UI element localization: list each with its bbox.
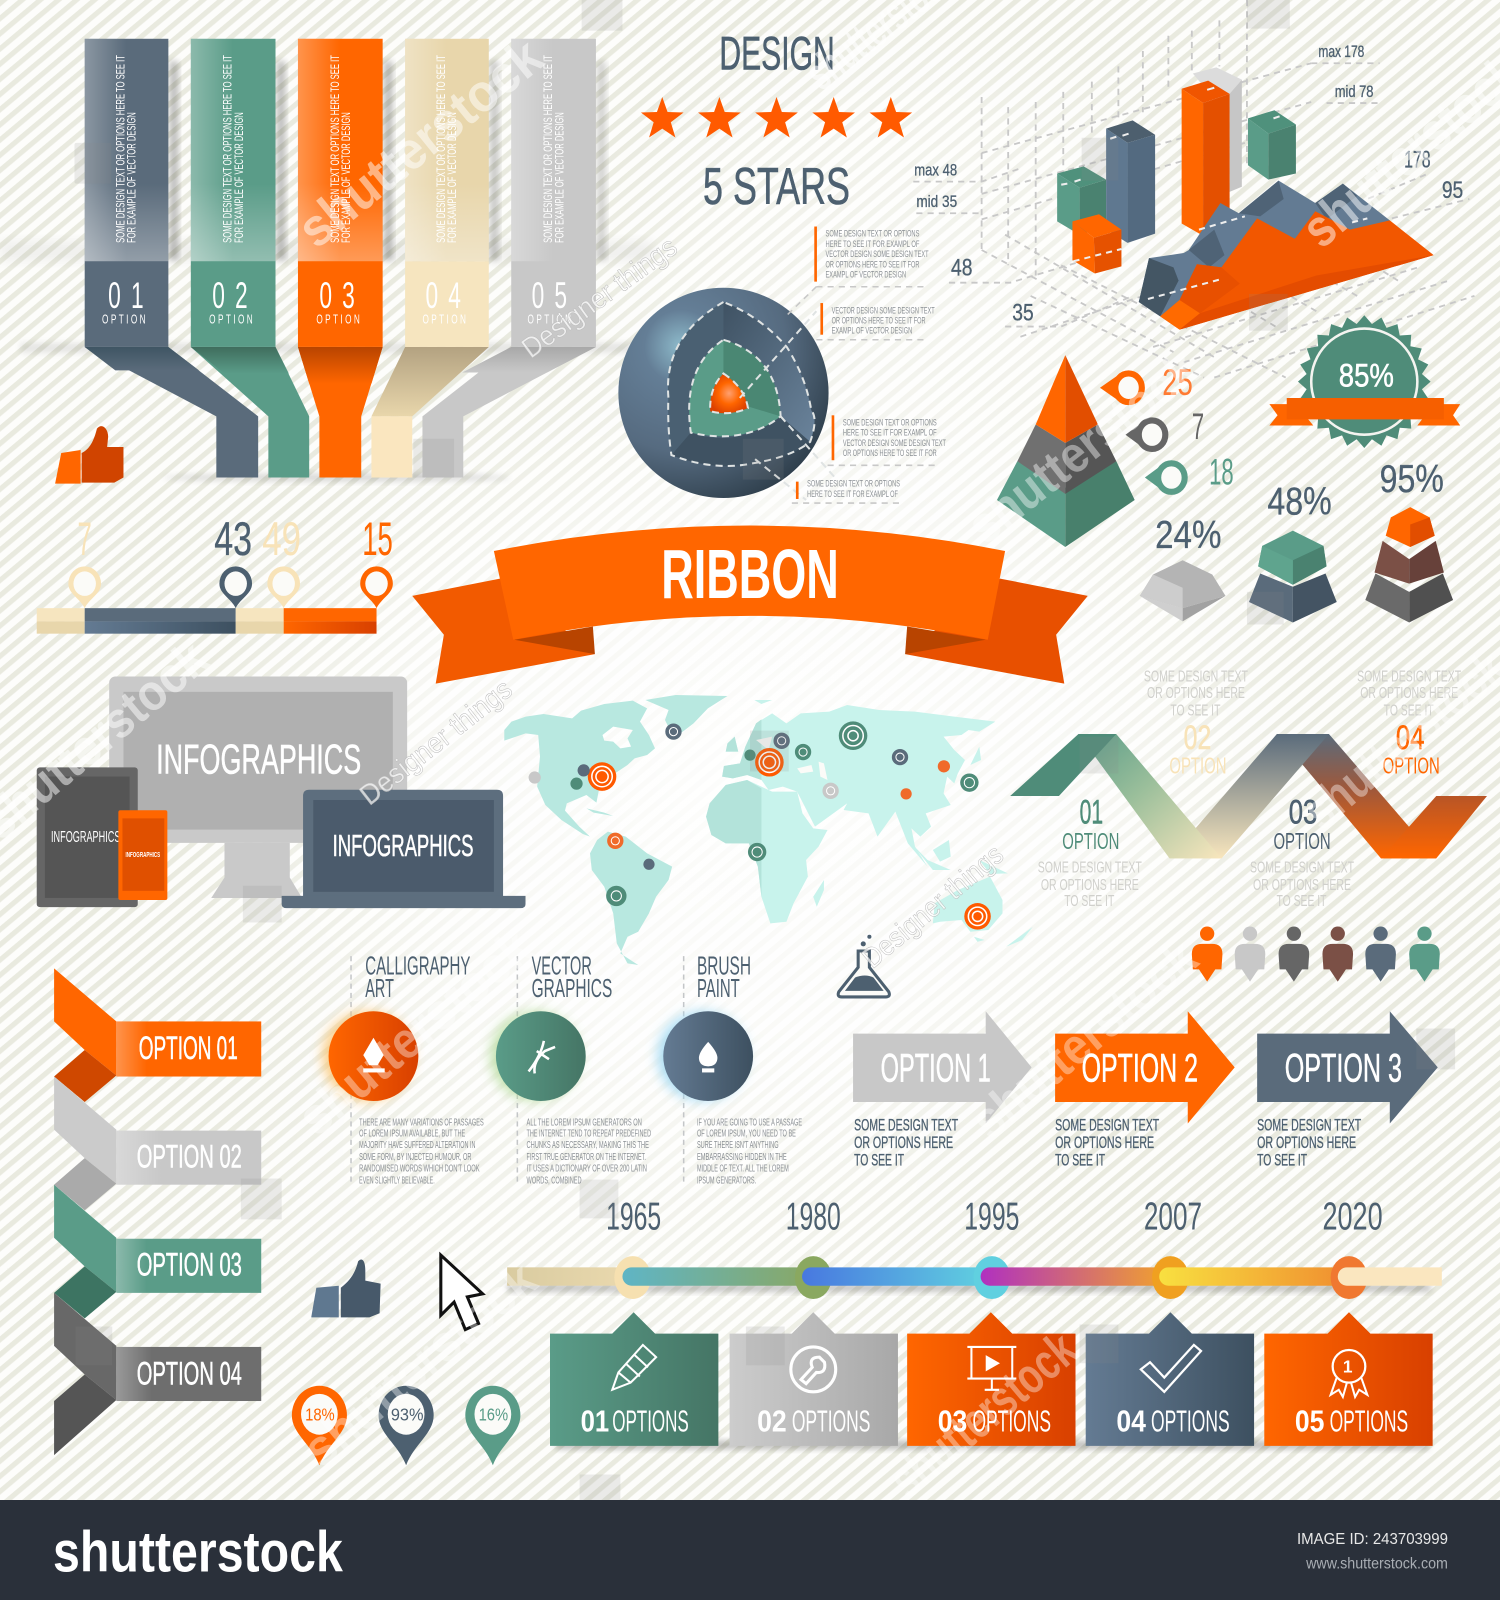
panel: brush paint: OF LOREM IPSUM, YOU NEED TO BE xyxy=(697,1129,796,1140)
footer image id: IMAGE ID: 243703999 xyxy=(1297,1531,1448,1548)
watermarks: shutterstock xyxy=(956,340,1209,555)
option 02 xyxy=(54,1077,261,1210)
column 05: 05 xyxy=(532,276,577,317)
marker 25: 25 xyxy=(1162,362,1193,403)
arrow: option 3: SOME DESIGN TEXT xyxy=(1257,1117,1361,1135)
column 04: OPTION xyxy=(422,313,468,327)
chart labels: 95 xyxy=(1442,177,1463,204)
panel: brush paint xyxy=(657,952,802,1187)
option 04: OPTION 04 xyxy=(137,1355,242,1392)
panel: vector graphics: ALL THE LOREM IPSUM GENERATORS ON xyxy=(527,1118,642,1129)
watermarks: shutterstock xyxy=(287,27,554,259)
chart labels: 178 xyxy=(1404,146,1431,173)
callout: text block 2: VECTOR DESIGN SOME DESIGN TEXT xyxy=(832,305,935,315)
box 02 xyxy=(730,1312,898,1446)
column 01: FOR EXAMPLE OF VECTOR DESIGN xyxy=(125,112,139,243)
stat: 95 percent block xyxy=(1365,458,1453,622)
stat: 48 percent block: 48% xyxy=(1267,480,1332,523)
chart: zigzag ribbon xyxy=(1010,669,1487,910)
column 03: 03 xyxy=(319,276,365,317)
grid floor xyxy=(913,0,1474,378)
panel: brush paint: IF YOU ARE GOING TO USE A PASSAGE xyxy=(697,1118,802,1129)
column 05: OPTION xyxy=(528,313,573,327)
heading: design: DESIGN xyxy=(719,27,835,79)
watermarks: shutterstock xyxy=(960,928,1208,1149)
icon: slate thumbs up xyxy=(311,1259,381,1317)
arrow: option 1: OR OPTIONS HERE xyxy=(854,1134,953,1152)
zigzag bands xyxy=(1010,734,1487,858)
callout: text block 2: OR OPTIONS HERE TO SEE IT FOR xyxy=(832,315,926,325)
box 01: OPTIONS xyxy=(612,1405,689,1439)
Africa and Eurasia xyxy=(706,700,1033,947)
marker 18 xyxy=(1145,452,1234,493)
panel: calligraphy art: MAJORITY HAVE SUFFERED ALTERATION IN xyxy=(359,1140,476,1151)
chart labels: max 48 xyxy=(914,162,957,180)
callout: text block 3: OR OPTIONS HERE TO SEE IT FOR xyxy=(843,448,937,458)
panel: calligraphy art: EVEN SLIGHTLY BELIEVABLE. xyxy=(359,1176,435,1187)
arrow: option 1: TO SEE IT xyxy=(854,1151,904,1169)
pin: 18 percent xyxy=(292,1386,347,1465)
world map xyxy=(504,695,1033,965)
watermarks: shutterstock xyxy=(287,918,543,1146)
box 01: 01 xyxy=(581,1405,609,1439)
option 01: OPTION 01 xyxy=(139,1029,238,1066)
stat: 95 percent block: 95% xyxy=(1380,458,1444,501)
pin: 93 percent xyxy=(379,1386,434,1465)
light descriptive text: SOME DESIGN TEXT xyxy=(1144,669,1248,686)
icon: cursor arrow xyxy=(441,1255,483,1330)
box 02: OPTIONS xyxy=(792,1405,870,1439)
box 05 xyxy=(1264,1312,1433,1446)
panel: calligraphy art: CALLIGRAPHY xyxy=(365,952,470,980)
column 05 xyxy=(422,39,596,478)
years: 1980 xyxy=(786,1196,841,1239)
column 03: FOR EXAMPLE OF VECTOR DESIGN xyxy=(339,112,353,243)
tablet: INFOGRAPHICS xyxy=(51,829,120,846)
option labels xyxy=(1062,719,1440,854)
timeline track xyxy=(507,1256,1442,1299)
chart: timeline xyxy=(507,1196,1442,1299)
Americas and Greenland xyxy=(504,695,728,965)
callout: text block 1: EXAMPL OF VECTOR DESIGN xyxy=(826,270,906,280)
column 02: 02 xyxy=(212,276,258,317)
footer bar xyxy=(0,1500,1500,1600)
box 01 xyxy=(550,1312,718,1446)
arrow: option 3: OPTION 3 xyxy=(1285,1047,1402,1091)
pin 43: 43 xyxy=(214,513,252,565)
callout: text block 2: EXAMPL OF VECTOR DESIGN xyxy=(832,326,912,336)
pin: 16 percent: 16% xyxy=(479,1404,508,1424)
watermarks: shutterstock xyxy=(292,1250,548,1478)
callout: text block 1: VECTOR DESIGN SOME DESIGN TEXT xyxy=(826,249,929,259)
callout: text block 3 xyxy=(828,415,946,465)
panel: calligraphy art: RANDOMISED WORDS WHICH DON'T LOOK xyxy=(359,1163,480,1174)
light descriptive text xyxy=(1038,669,1461,910)
box 05: 1 xyxy=(1343,1356,1353,1376)
inland seas xyxy=(756,737,828,780)
callout: text block 1 xyxy=(786,227,929,316)
light descriptive text: OR OPTIONS HERE xyxy=(1253,877,1351,894)
watermarks: Designer things xyxy=(516,231,683,365)
box 03 xyxy=(907,1312,1076,1446)
laptop xyxy=(282,790,526,908)
column 02: FOR EXAMPLE OF VECTOR DESIGN xyxy=(232,112,246,243)
bar: orange tall xyxy=(1182,81,1230,236)
callout: text block 2 xyxy=(816,303,935,340)
arrow: option 2: OPTION 2 xyxy=(1082,1047,1198,1091)
column 04: 04 xyxy=(426,276,471,317)
phone: INFOGRAPHICS xyxy=(126,851,160,859)
callout: text block 3: HERE TO SEE IT FOR EXAMPL OF xyxy=(843,428,937,438)
panel: vector graphics xyxy=(490,952,651,1187)
option labels: 02 xyxy=(1184,719,1211,757)
light descriptive text: TO SEE IT xyxy=(1277,893,1327,910)
column 05: FOR EXAMPLE OF VECTOR DESIGN xyxy=(552,112,566,243)
panel: calligraphy art xyxy=(322,952,484,1187)
panel: brush paint: EMBARRASSING HIDDEN IN THE xyxy=(697,1152,787,1163)
chart labels: mid 78 xyxy=(1335,83,1373,101)
heading: 5 stars: 5 STARS xyxy=(703,158,850,216)
pin 49 xyxy=(262,513,301,608)
callout: text block 1: OR OPTIONS HERE TO SEE IT FOR xyxy=(826,259,920,269)
panel: vector graphics: WORDS, COMBINED xyxy=(527,1176,582,1187)
watermarks: Designer things xyxy=(354,673,518,812)
panel: sphere with callouts xyxy=(618,227,946,503)
icon: vine xyxy=(529,1041,555,1073)
callout: text block 4: HERE TO SEE IT FOR EXAMPL OF xyxy=(807,489,898,499)
box 03: 03 xyxy=(938,1405,967,1439)
pin: 18 percent: 18% xyxy=(305,1404,335,1424)
option labels: OPTION xyxy=(1169,752,1227,778)
column 03: OPTION xyxy=(316,313,362,327)
callout: text block 1: HERE TO SEE IT FOR EXAMPL OF xyxy=(826,239,920,249)
tablet xyxy=(37,767,138,907)
pin 7 xyxy=(68,513,101,608)
bar: slate xyxy=(1106,120,1155,243)
years xyxy=(606,1196,1383,1239)
monitor xyxy=(109,677,407,898)
pin: 93 percent: 93% xyxy=(391,1404,423,1424)
arrow: option 1: OPTION 1 xyxy=(881,1047,991,1091)
bar: green left xyxy=(1057,166,1106,235)
option 01 xyxy=(54,968,261,1102)
panel: pin bar xyxy=(37,513,393,634)
arrow: option 3: OR OPTIONS HERE xyxy=(1257,1134,1356,1152)
panel: vector graphics: IT USES A DICTIONARY OF OVER 200 LATIN xyxy=(527,1163,647,1174)
monitor: INFOGRAPHICS xyxy=(156,735,361,782)
pin 49: 49 xyxy=(262,513,301,565)
callout: text block 1: SOME DESIGN TEXT OR OPTIONS xyxy=(826,229,919,239)
panel: calligraphy art: OF LOREM IPSUM AVAILABLE, BUT THE xyxy=(359,1129,466,1140)
box 04: OPTIONS xyxy=(1151,1405,1230,1439)
marker 7 xyxy=(1126,406,1204,449)
footer site: www.shutterstock.com xyxy=(1305,1555,1448,1572)
panel: vector graphics: GRAPHICS xyxy=(532,975,612,1003)
column 03 xyxy=(298,39,383,478)
light descriptive text: TO SEE IT xyxy=(1384,702,1434,719)
light descriptive text: OR OPTIONS HERE xyxy=(1360,685,1458,702)
option 04 xyxy=(54,1293,261,1455)
panel: chevron options xyxy=(54,968,261,1455)
chart labels: mid 35 xyxy=(916,193,957,211)
marker 25 xyxy=(1100,362,1193,403)
laptop: INFOGRAPHICS xyxy=(333,829,473,863)
stat: 48 percent block xyxy=(1249,480,1337,622)
column 04 xyxy=(371,39,489,478)
panel: brush paint: SURE THERE ISN'T ANYTHING xyxy=(697,1140,779,1151)
icon: brush xyxy=(699,1042,717,1072)
panel: calligraphy art: SOME FORM, BY INJECTED HUMOUR, OR xyxy=(359,1152,471,1163)
arrow: option 3 xyxy=(1257,1011,1438,1169)
arrow: option 2: TO SEE IT xyxy=(1055,1151,1105,1169)
badge: 85 percent: 85% xyxy=(1339,357,1394,394)
chart labels: max 178 xyxy=(1318,43,1364,61)
panel: brush paint: PAINT xyxy=(697,975,740,1003)
panel: option boxes xyxy=(550,1312,1433,1449)
years: 2020 xyxy=(1322,1196,1383,1239)
option labels: OPTION xyxy=(1273,828,1331,854)
option labels: 03 xyxy=(1289,793,1317,831)
box 02: 02 xyxy=(757,1405,787,1439)
arrow: option 2: OR OPTIONS HERE xyxy=(1055,1134,1154,1152)
years: 1965 xyxy=(606,1196,661,1239)
box 03: OPTIONS xyxy=(972,1405,1051,1439)
bar segments xyxy=(37,608,377,634)
marker 18: 18 xyxy=(1209,452,1234,493)
light descriptive text: SOME DESIGN TEXT xyxy=(1038,859,1142,876)
panel: vector graphics: VECTOR xyxy=(532,952,592,980)
option labels: 01 xyxy=(1080,793,1103,831)
panel: brush paint: IPSUM GENERATORS. xyxy=(697,1176,756,1187)
column 02: OPTION xyxy=(209,313,255,327)
arrow: option 1: SOME DESIGN TEXT xyxy=(854,1117,958,1135)
light descriptive text: OR OPTIONS HERE xyxy=(1147,685,1245,702)
light descriptive text: OR OPTIONS HERE xyxy=(1041,877,1139,894)
column 01: OPTION xyxy=(102,313,148,327)
box 05: OPTIONS xyxy=(1330,1405,1408,1439)
arrow: option 2 xyxy=(1055,1011,1235,1169)
panel: devices xyxy=(37,677,526,908)
panel: vector graphics: THE INTERNET TEND TO REPEAT PREDEFINED xyxy=(527,1129,651,1140)
option 03: OPTION 03 xyxy=(137,1246,242,1283)
light descriptive text: TO SEE IT xyxy=(1170,702,1220,719)
watermarks: shutterstock xyxy=(879,1320,1088,1508)
callout: text block 4 xyxy=(792,479,903,503)
panel: calligraphy art: ART xyxy=(365,975,394,1003)
panel: calligraphy art: THERE ARE MANY VARIATIONS OF PASSAGES xyxy=(359,1118,484,1129)
panel: brush paint: MIDDLE OF TEXT. ALL THE LOREM xyxy=(697,1163,789,1174)
badge: 85 percent xyxy=(1269,315,1460,448)
area: orange mountains xyxy=(1148,211,1434,330)
panel: five option columns xyxy=(0,39,653,482)
marker 7: 7 xyxy=(1192,406,1204,447)
bar: orange cube xyxy=(1072,214,1121,273)
option labels: 04 xyxy=(1396,719,1424,757)
box 04 xyxy=(1086,1312,1254,1446)
ribbon banner xyxy=(412,526,1088,684)
panel: brush paint: BRUSH xyxy=(697,952,751,980)
chart: isometric bars and mountains xyxy=(913,0,1474,378)
icon: orange thumbs up xyxy=(55,426,123,484)
panel: vector graphics: CHUNKS AS NECESSARY, MAKING THIS THE xyxy=(527,1140,649,1151)
watermarks: Designer things xyxy=(856,839,1010,975)
chart labels xyxy=(914,43,1463,326)
column 04: FOR EXAMPLE OF VECTOR DESIGN xyxy=(445,112,459,243)
years: 1995 xyxy=(964,1196,1019,1239)
bar: grey back xyxy=(1193,67,1242,192)
pin 15 xyxy=(360,513,393,608)
pin 7: 7 xyxy=(78,513,92,565)
callout: text block 3: SOME DESIGN TEXT OR OPTIONS xyxy=(843,418,937,428)
chart: layered pyramid xyxy=(997,355,1234,547)
marker: green cluster xyxy=(570,721,979,906)
pin: 16 percent xyxy=(465,1386,520,1465)
bar: green right xyxy=(1248,110,1296,180)
marker: big orange cluster xyxy=(588,748,991,930)
column 01: 01 xyxy=(108,276,154,317)
ribbon banner: RIBBON xyxy=(661,535,839,613)
phone xyxy=(118,810,167,900)
continents xyxy=(504,695,1033,965)
stat: 24 percent block xyxy=(1140,514,1226,621)
pin 43 xyxy=(214,513,252,608)
icon: flask xyxy=(838,935,889,997)
arrow: option 3: TO SEE IT xyxy=(1257,1151,1307,1169)
marker: slate and grey cluster xyxy=(529,723,908,870)
box 04: 04 xyxy=(1116,1405,1146,1439)
option 03 xyxy=(54,1185,261,1318)
light descriptive text: TO SEE IT xyxy=(1064,893,1114,910)
stat: 24 percent block: 24% xyxy=(1155,514,1221,557)
shaded west side xyxy=(706,719,761,897)
icons: people row xyxy=(1192,927,1440,982)
light descriptive text: SOME DESIGN TEXT xyxy=(1250,859,1354,876)
rating stars xyxy=(641,97,912,138)
footer logo: shutterstock xyxy=(53,1520,343,1584)
icon: pen nib xyxy=(363,1038,385,1072)
panel: vector graphics: FIRST TRUE GENERATOR ON THE INTERNET. xyxy=(527,1152,646,1163)
pin 15: 15 xyxy=(362,513,393,565)
sphere xyxy=(618,288,837,500)
chart labels: 48 xyxy=(951,255,972,282)
callout: text block 3: VECTOR DESIGN SOME DESIGN TEXT xyxy=(843,438,946,448)
column 01 xyxy=(85,39,258,478)
arrow: option 1 xyxy=(853,1011,1032,1169)
years: 2007 xyxy=(1144,1196,1202,1239)
option labels: OPTION xyxy=(1383,752,1440,778)
option 02: OPTION 02 xyxy=(137,1137,242,1174)
box 05: 05 xyxy=(1295,1405,1324,1439)
chart labels: 35 xyxy=(1012,299,1034,326)
option labels: OPTION xyxy=(1062,828,1119,854)
arrow: option 2: SOME DESIGN TEXT xyxy=(1055,1117,1159,1135)
callout: text block 4: SOME DESIGN TEXT OR OPTIONS xyxy=(807,479,900,489)
area: slate mountains xyxy=(1139,181,1390,316)
column 02 xyxy=(191,39,309,478)
title: design five stars xyxy=(641,27,912,216)
